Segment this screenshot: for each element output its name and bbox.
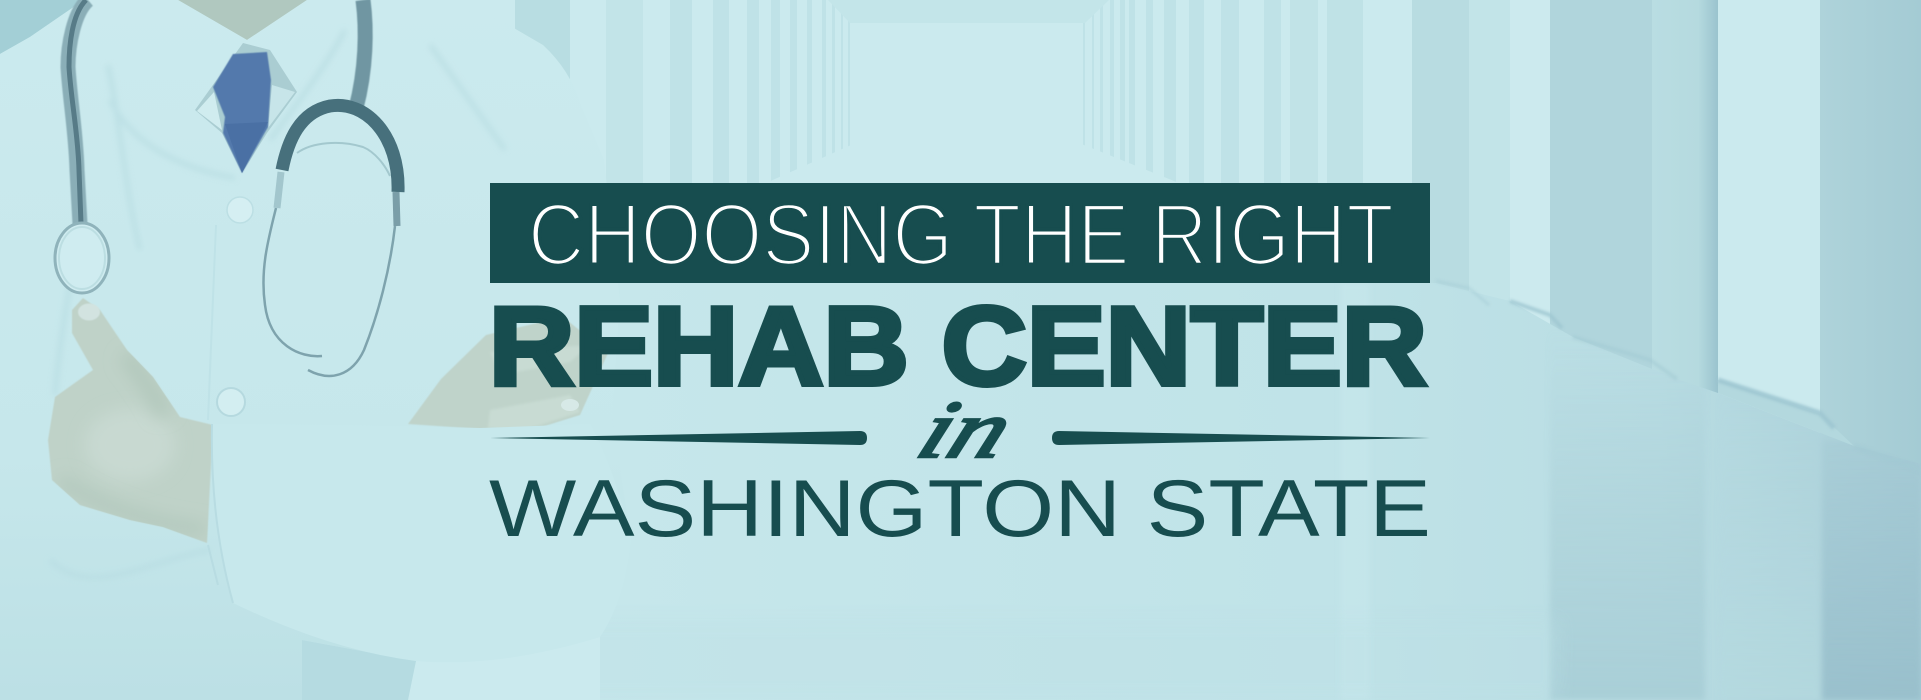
divider with "in" [490,385,1430,475]
placket edge [208,225,216,420]
coat fold shading [50,30,505,577]
right tapered line [1052,431,1430,445]
corridor end wall [766,0,1179,310]
corridor right wall stripes [1083,0,1363,300]
skirting under light wall panel [1718,380,1854,446]
floor skirting shadows [1436,281,1921,470]
shirt collar [195,43,297,173]
left fist [48,298,213,543]
heading: choosing the right: CHOOSING THE RIGHT [528,186,1394,284]
neck [178,0,307,40]
heading: rehab center: REHAB CENTER [489,284,1427,408]
lab coat [0,0,631,700]
background: hospital corridor [515,0,1921,700]
word: in: in [906,385,1026,475]
heading: washington state: WASHINGTON STATE [489,464,1431,554]
left tapered line [490,431,867,445]
corridor left wall stripes [515,0,850,300]
sleeve and cuff [212,424,631,662]
buttons [227,197,253,223]
necktie [213,52,271,173]
floor [600,283,1921,700]
right wall panels [1412,0,1921,500]
gap below the sleeve [302,640,416,700]
floor reflections [1550,475,1921,700]
top-left wall corner [0,0,84,54]
corridor ceiling [828,0,1109,23]
thumbnail [78,304,100,320]
right hand [408,317,608,433]
doctor photo [0,0,631,700]
stethoscope [55,0,398,376]
title banner [490,183,1430,284]
